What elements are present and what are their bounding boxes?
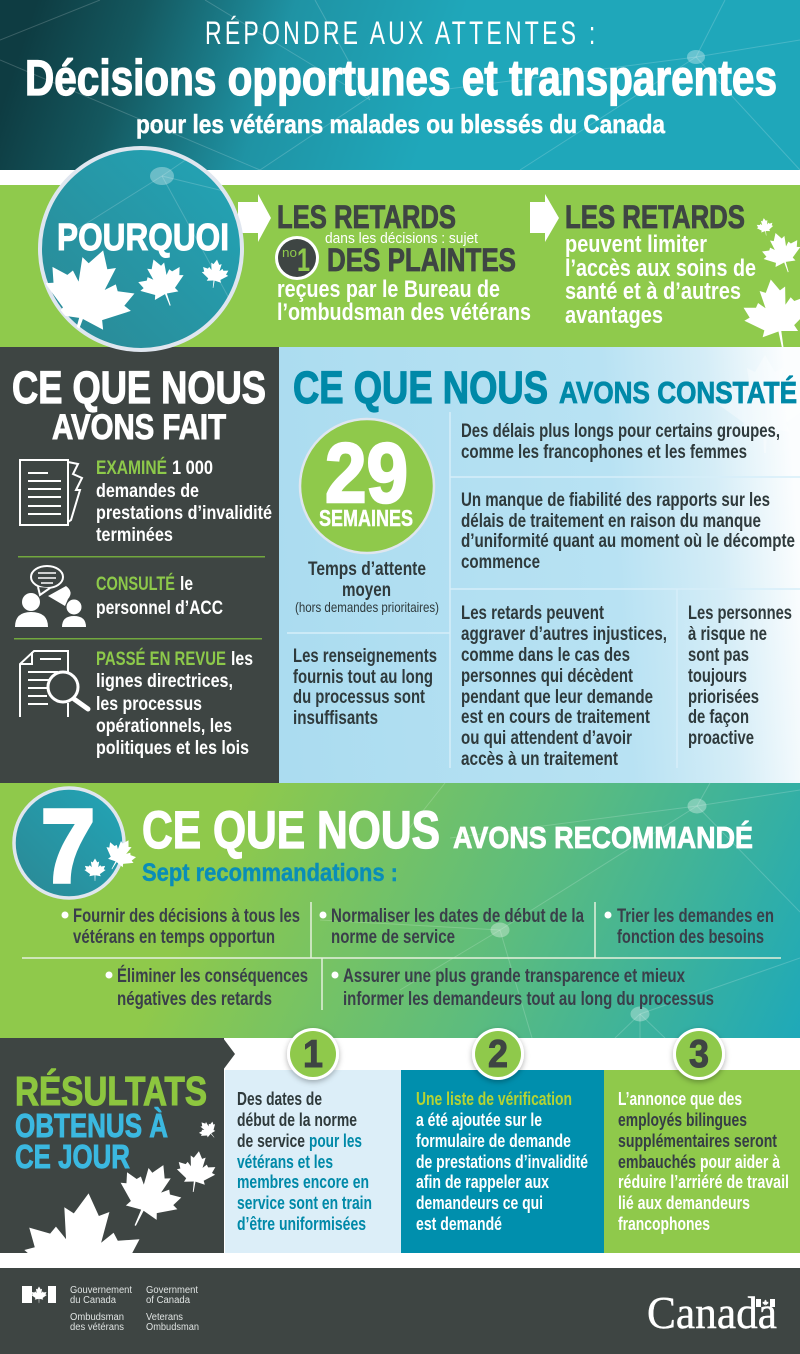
heading: what we recommended: CE QUE NOUS [142, 801, 440, 860]
icon: consultation [15, 566, 86, 627]
result card 2 [401, 1070, 604, 1253]
stat: 29 weeks: SEMAINES [319, 505, 413, 531]
panel: what we did [0, 347, 279, 783]
result card 1: début de la norme [237, 1110, 357, 1130]
badge: seven: 7 [41, 789, 95, 905]
result card 1: Des dates de [237, 1089, 322, 1109]
text: examined: demandes de [96, 481, 199, 502]
result card 3: embauchés [618, 1152, 696, 1172]
recommendation: eliminate consequences: négatives des retards [117, 989, 272, 1010]
text: reviewed: lignes directrices, [96, 671, 233, 692]
text: reviewed: politiques et les lois [96, 738, 249, 759]
text: government signature english: of Canada [146, 1295, 190, 1306]
text: unreliable reporting: commence [461, 552, 540, 573]
text: other injustices: aggraver d’autres injustices, [461, 624, 667, 645]
icon: documents [20, 460, 82, 525]
result card 2: demandeurs ce qui [416, 1193, 543, 1213]
text: in decisions: dans les décisions : sujet [325, 230, 479, 247]
recommendation: eliminate consequences: Éliminer les conséquences [117, 965, 308, 987]
heading: complaints: DES PLAINTES [327, 242, 516, 278]
text: people at risk: à risque ne [688, 624, 767, 645]
icon: government flag [22, 1286, 56, 1303]
arrow: second [530, 194, 559, 242]
recommendation: transparency [332, 966, 714, 1010]
text: limit access: peuvent limiter [565, 231, 707, 258]
badge: number 1: 1 [303, 1033, 323, 1076]
heading: obtained to date: CE JOUR [15, 1138, 130, 1175]
text: insufficient information: du processus sont [293, 687, 426, 708]
result card 1: membres encore en [237, 1172, 369, 1192]
text: other injustices: Les retards peuvent [461, 603, 605, 624]
text: other injustices: personnes qui décèdent [461, 666, 634, 687]
text: examined: 1 000 [172, 458, 213, 479]
text: received by the office: l’ombudsman des vétérans [277, 299, 531, 326]
text: examined: prestations d’invalidité [96, 503, 272, 524]
result card 1: d’être uniformisées [237, 1214, 366, 1234]
stat: 29 weeks [300, 419, 434, 553]
heading: what we recommended [142, 801, 753, 860]
result card 2: a été ajoutée sur le [416, 1110, 542, 1130]
text: limit access: santé et à d’autres [565, 278, 741, 305]
recommendation: standardize dates [320, 906, 584, 948]
text: people at risk [688, 603, 792, 749]
result card 2: afin de rappeler aux [416, 1172, 549, 1192]
text: consulted: CONSULTÉ [96, 573, 175, 595]
result card 2: de prestations d’invalidité [416, 1152, 588, 1172]
heading: what we did: AVONS FAIT [52, 408, 226, 447]
result card 1 [225, 1070, 401, 1253]
badge: number one: no [282, 245, 297, 260]
text: insufficient information: insuffisants [293, 708, 378, 729]
heading: what we recommended: AVONS RECOMMANDÉ [453, 820, 753, 855]
title: eyebrow: RÉPONDRE AUX ATTENTES : [205, 15, 595, 51]
text: longer delays [461, 421, 780, 463]
text: government signature french: des vétérans [70, 1322, 124, 1333]
text: government signature english: Government [146, 1285, 198, 1296]
recommendation: timely decisions: Fournir des décisions à tous les [73, 906, 300, 927]
panel: what we found [279, 347, 800, 783]
result card 3 [604, 1070, 800, 1253]
heading: obtained to date [15, 1107, 168, 1175]
icon: maple leaves right [744, 218, 800, 347]
result card 3: francophones [618, 1214, 710, 1234]
result card 1: vétérans et les [237, 1152, 333, 1172]
badge: number one: 1 [297, 242, 310, 278]
result card 3: L’annonce que des [618, 1089, 742, 1109]
logo: Canada wordmark: Canada [647, 1288, 777, 1338]
text: government signature english [146, 1285, 199, 1333]
text: limit access [565, 231, 756, 329]
text: consulted: le [180, 574, 193, 595]
text: reviewed: opérationnels, les [96, 716, 232, 737]
text: other injustices [461, 603, 667, 770]
circle: why [31, 148, 242, 356]
recommendation: timely decisions: vétérans en temps opportun [73, 927, 275, 948]
heading: results: RÉSULTATS [15, 1068, 207, 1114]
subheading: seven recommendations: Sept recommandations : [142, 859, 398, 887]
recommendation: transparency: Assurer une plus grande transparence et mieux [343, 966, 685, 987]
stat: 29 weeks: 29 [325, 426, 408, 520]
text: average wait: Temps d’attente [308, 559, 426, 580]
icon: maple leaves results [24, 1122, 216, 1253]
heading: what we did: CE QUE NOUS [12, 362, 266, 413]
footer [0, 1253, 800, 1354]
text: insufficient information: Les renseignements [293, 646, 437, 667]
result card 2: Une liste de vérification [416, 1089, 572, 1109]
heading: what we did [12, 362, 266, 447]
panel: what we recommended [0, 783, 800, 1038]
text: government signature english: Veterans [146, 1312, 183, 1323]
result card 1: pour les [309, 1131, 362, 1151]
text: reviewed: les [231, 649, 253, 670]
heading: delays: LES RETARDS [277, 199, 456, 235]
result card 1: service sont en train [237, 1193, 372, 1213]
text: received by the office: reçues par le Bureau de [277, 276, 500, 303]
text: reviewed: les processus [96, 694, 202, 715]
text: consulted [96, 573, 223, 619]
text: average wait: (hors demandes prioritaires) [295, 599, 439, 615]
text: average wait [295, 559, 439, 615]
badge: number one [275, 236, 319, 280]
panel: results [0, 1027, 800, 1253]
text: unreliable reporting [461, 490, 795, 573]
text: government signature french: Ombudsman [70, 1312, 124, 1323]
text: other injustices: est en cours de traitement [461, 707, 651, 728]
recommendation: standardize dates: norme de service [331, 927, 455, 948]
text: received by the office [277, 276, 531, 326]
badge: number 2: 2 [488, 1033, 508, 1076]
text: consulted: personnel d’ACC [96, 598, 223, 619]
text: reviewed: PASSÉ EN REVUE [96, 648, 226, 670]
header banner [0, 0, 800, 170]
recommendation: eliminate consequences [106, 965, 308, 1010]
recommendation: triage [604, 906, 774, 948]
badge: number 2 [472, 1028, 524, 1080]
text: reviewed [96, 648, 253, 759]
recommendation: transparency: informer les demandeurs tout au long du processus [343, 989, 714, 1010]
heading: delays second: LES RETARDS [565, 199, 745, 235]
panel: why [0, 185, 800, 347]
text: insufficient information [293, 646, 437, 729]
text: people at risk: sont pas [688, 645, 749, 666]
text: people at risk: priorisées [688, 687, 759, 708]
icon: review magnifier [20, 651, 88, 717]
heading: why: POURQUOI [57, 217, 229, 259]
badge: number 3: 3 [689, 1033, 709, 1076]
result card 3: employés bilingues [618, 1110, 747, 1130]
result card 1: de service [237, 1131, 305, 1151]
recommendation: timely decisions [62, 906, 300, 948]
text: people at risk: proactive [688, 728, 754, 749]
icon: faint maple leaf [719, 355, 800, 453]
heading: obtained to date: OBTENUS À [15, 1107, 168, 1144]
heading: what we found [293, 362, 797, 413]
text: limit access: avantages [565, 302, 663, 329]
text: people at risk: de façon [688, 707, 749, 728]
heading: what we found: CE QUE NOUS [293, 362, 548, 413]
text: other injustices: accès à un traitement [461, 749, 619, 770]
badge: number 3 [673, 1028, 725, 1080]
text: insufficient information: fournis tout au long [293, 667, 433, 688]
text: examined: EXAMINÉ [96, 457, 167, 479]
text: limit access: l’accès aux soins de [565, 255, 756, 282]
text: government signature french: Gouvernement [70, 1285, 132, 1296]
text: government signature english: Ombudsman [146, 1322, 199, 1333]
badge: number 1 [287, 1028, 339, 1080]
text: other injustices: comme dans le cas des [461, 645, 630, 666]
text: government signature french: du Canada [70, 1295, 116, 1306]
text: people at risk: toujours [688, 666, 747, 687]
result card 3: pour aider à [700, 1152, 781, 1172]
recommendation: standardize dates: Normaliser les dates de début de la [331, 906, 584, 927]
badge: seven [14, 788, 142, 905]
text: examined [96, 457, 272, 546]
text: other injustices: ou qui attendent d’avoir [461, 728, 632, 749]
title: subheading: pour les vétérans malades ou blessés du Canada [136, 109, 665, 139]
result card 2: formulaire de demande [416, 1131, 571, 1151]
text: average wait: moyen [342, 580, 391, 601]
result card 2: est demandé [416, 1214, 502, 1234]
arrow: first [238, 194, 271, 242]
icon: maple leaves in circle [46, 250, 228, 330]
text: government signature french [70, 1285, 132, 1333]
result card 3: lié aux demandeurs [618, 1193, 750, 1213]
text: other injustices: pendant que leur demande [461, 687, 653, 708]
text: examined: terminées [96, 525, 173, 546]
